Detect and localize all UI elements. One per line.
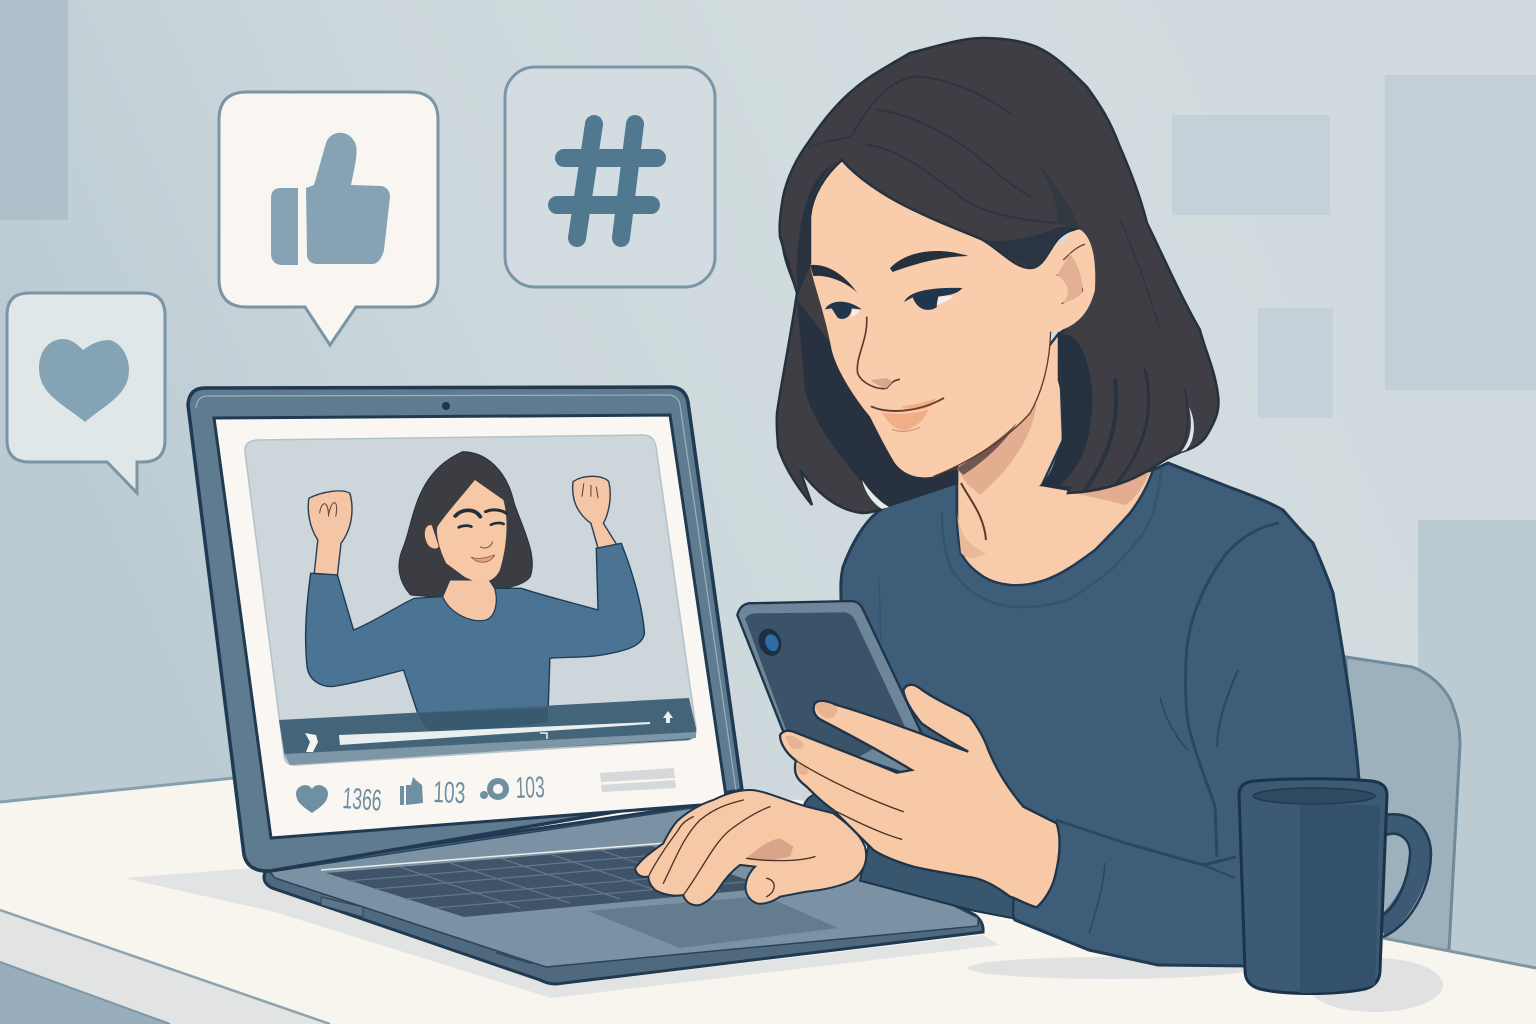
camera bbox=[755, 625, 785, 659]
mouth bbox=[882, 409, 928, 430]
icon: thumbs up bbox=[271, 133, 390, 265]
icon: hashtag bbox=[557, 124, 657, 238]
speech bubble: hashtag bbox=[505, 67, 715, 287]
finger nails and creases bbox=[815, 703, 837, 718]
video person bbox=[306, 452, 644, 713]
right hair shading bbox=[1042, 334, 1194, 490]
neck bbox=[443, 580, 496, 621]
woman hair front bbox=[780, 38, 1219, 493]
hair bbox=[399, 452, 532, 598]
woman sweater bbox=[803, 463, 1370, 966]
ear bbox=[1057, 229, 1095, 330]
placeholder lines bbox=[600, 768, 676, 792]
woman hair back bbox=[777, 190, 957, 513]
eyebrows bbox=[890, 251, 968, 272]
engagement row bbox=[296, 771, 545, 818]
video control bar bbox=[279, 698, 696, 762]
icon: small thumb bbox=[400, 777, 423, 805]
neck shadow bbox=[957, 403, 1037, 495]
laptop screen bezel bbox=[188, 387, 742, 871]
forearm sleeve bbox=[803, 794, 1013, 918]
raised fists bbox=[308, 476, 617, 575]
keyboard bbox=[326, 846, 770, 917]
hinge highlight bbox=[321, 843, 666, 870]
speech bubble: thumbs up bbox=[219, 92, 438, 345]
hair strands bbox=[797, 77, 1160, 330]
play chevron bbox=[305, 733, 318, 752]
icon: small share bbox=[480, 781, 506, 799]
side port bbox=[321, 897, 363, 917]
mug handle bbox=[1380, 823, 1421, 928]
progress bar bbox=[339, 722, 650, 745]
table bbox=[0, 778, 1536, 1024]
icon: heart bbox=[39, 339, 129, 422]
video player bbox=[245, 435, 696, 765]
fullscreen arrow bbox=[663, 711, 673, 723]
webcam bbox=[442, 402, 450, 410]
like count: 1366 bbox=[342, 782, 383, 818]
coffee mug bbox=[1239, 779, 1431, 994]
phone hand bbox=[780, 685, 1060, 907]
video face bbox=[437, 480, 507, 582]
woman face bbox=[810, 157, 1062, 495]
sweater seams bbox=[879, 467, 1279, 933]
woman neck bbox=[957, 333, 1153, 585]
sweater bbox=[306, 543, 644, 713]
trackpad bbox=[588, 896, 838, 948]
typing hand bbox=[635, 790, 866, 905]
nose bbox=[857, 317, 900, 389]
sweater under bar bbox=[418, 708, 548, 735]
chair bbox=[1346, 657, 1460, 950]
speech bubble: heart bbox=[7, 293, 165, 493]
phone bbox=[737, 601, 922, 777]
share count: 103 bbox=[515, 771, 545, 805]
screen bbox=[214, 415, 727, 838]
background slivers bbox=[862, 480, 889, 509]
laptop bbox=[188, 387, 983, 984]
icon: small heart bbox=[296, 785, 328, 813]
eyes bbox=[904, 288, 962, 310]
thumb count: 103 bbox=[433, 776, 466, 810]
laptop base bbox=[264, 798, 983, 984]
